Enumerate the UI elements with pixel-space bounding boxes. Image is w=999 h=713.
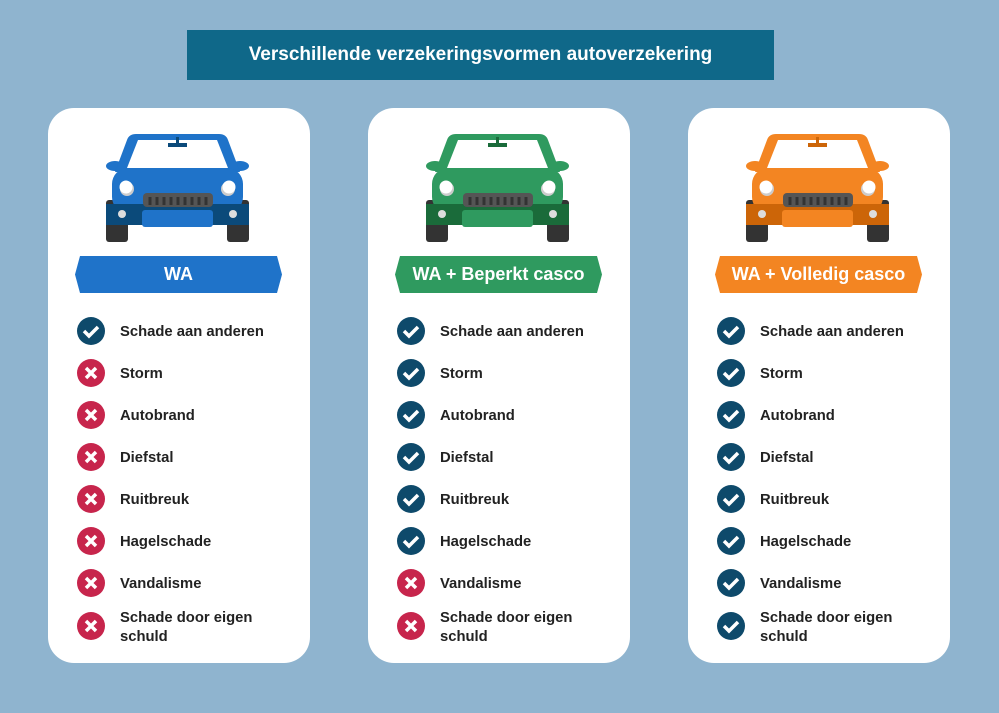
list: Beperkt casco coverage: Storm: [440, 366, 483, 382]
list: WA coverage: Schade door eigen: [120, 610, 252, 626]
ribbon: WA + Beperkt casco: WA + Beperkt casco: [413, 264, 584, 284]
icon: green car: [426, 134, 569, 242]
list: WA coverage: Autobrand: [120, 408, 195, 424]
ribbon: WA + Beperkt casco: [395, 256, 602, 293]
list: Volledig casco coverage: Autobrand: [760, 408, 835, 424]
list: WA coverage: Diefstal: [120, 450, 173, 466]
list: Beperkt casco coverage: [397, 317, 584, 645]
list: WA coverage: Hagelschade: [120, 534, 211, 550]
ribbon: WA: [75, 256, 282, 293]
list: Beperkt casco coverage: Schade door eigen: [440, 610, 572, 626]
list: WA coverage: Ruitbreuk: [120, 492, 189, 508]
list: Beperkt casco coverage: Ruitbreuk: [440, 492, 509, 508]
list: Beperkt casco coverage: Autobrand: [440, 408, 515, 424]
list: Volledig casco coverage: schuld: [760, 629, 808, 645]
list: WA coverage: Storm: [120, 366, 163, 382]
list: Beperkt casco coverage: Vandalisme: [440, 576, 521, 592]
list: WA coverage: Vandalisme: [120, 576, 201, 592]
list: Volledig casco coverage: Schade aan anderen: [760, 324, 904, 340]
list: Beperkt casco coverage: schuld: [440, 629, 488, 645]
list: Volledig casco coverage: Ruitbreuk: [760, 492, 829, 508]
list: WA coverage: Schade aan anderen: [120, 324, 264, 340]
list: Volledig casco coverage: Vandalisme: [760, 576, 841, 592]
list: Beperkt casco coverage: Schade aan anderen: [440, 324, 584, 340]
icon: blue car: [106, 134, 249, 242]
list: Beperkt casco coverage: Diefstal: [440, 450, 493, 466]
panel: WA + Beperkt casco: [368, 108, 630, 663]
ribbon: WA + Volledig casco: [715, 256, 922, 293]
list: Beperkt casco coverage: Hagelschade: [440, 534, 531, 550]
list: WA coverage: [77, 317, 264, 645]
panel: WA + Volledig casco: [688, 108, 950, 663]
list: Volledig casco coverage: [717, 317, 904, 645]
list: Volledig casco coverage: Schade door eigen: [760, 610, 892, 626]
list: Volledig casco coverage: Storm: [760, 366, 803, 382]
icon: orange car: [746, 134, 889, 242]
title: [187, 30, 774, 80]
ribbon: WA + Volledig casco: WA + Volledig casco: [732, 264, 905, 284]
list: Volledig casco coverage: Hagelschade: [760, 534, 851, 550]
ribbon: WA: WA: [164, 264, 193, 284]
title: Verschillende verzekeringsvormen autoverzekering: [249, 44, 712, 65]
panel: WA: [48, 108, 310, 663]
list: Volledig casco coverage: Diefstal: [760, 450, 813, 466]
list: WA coverage: schuld: [120, 629, 168, 645]
